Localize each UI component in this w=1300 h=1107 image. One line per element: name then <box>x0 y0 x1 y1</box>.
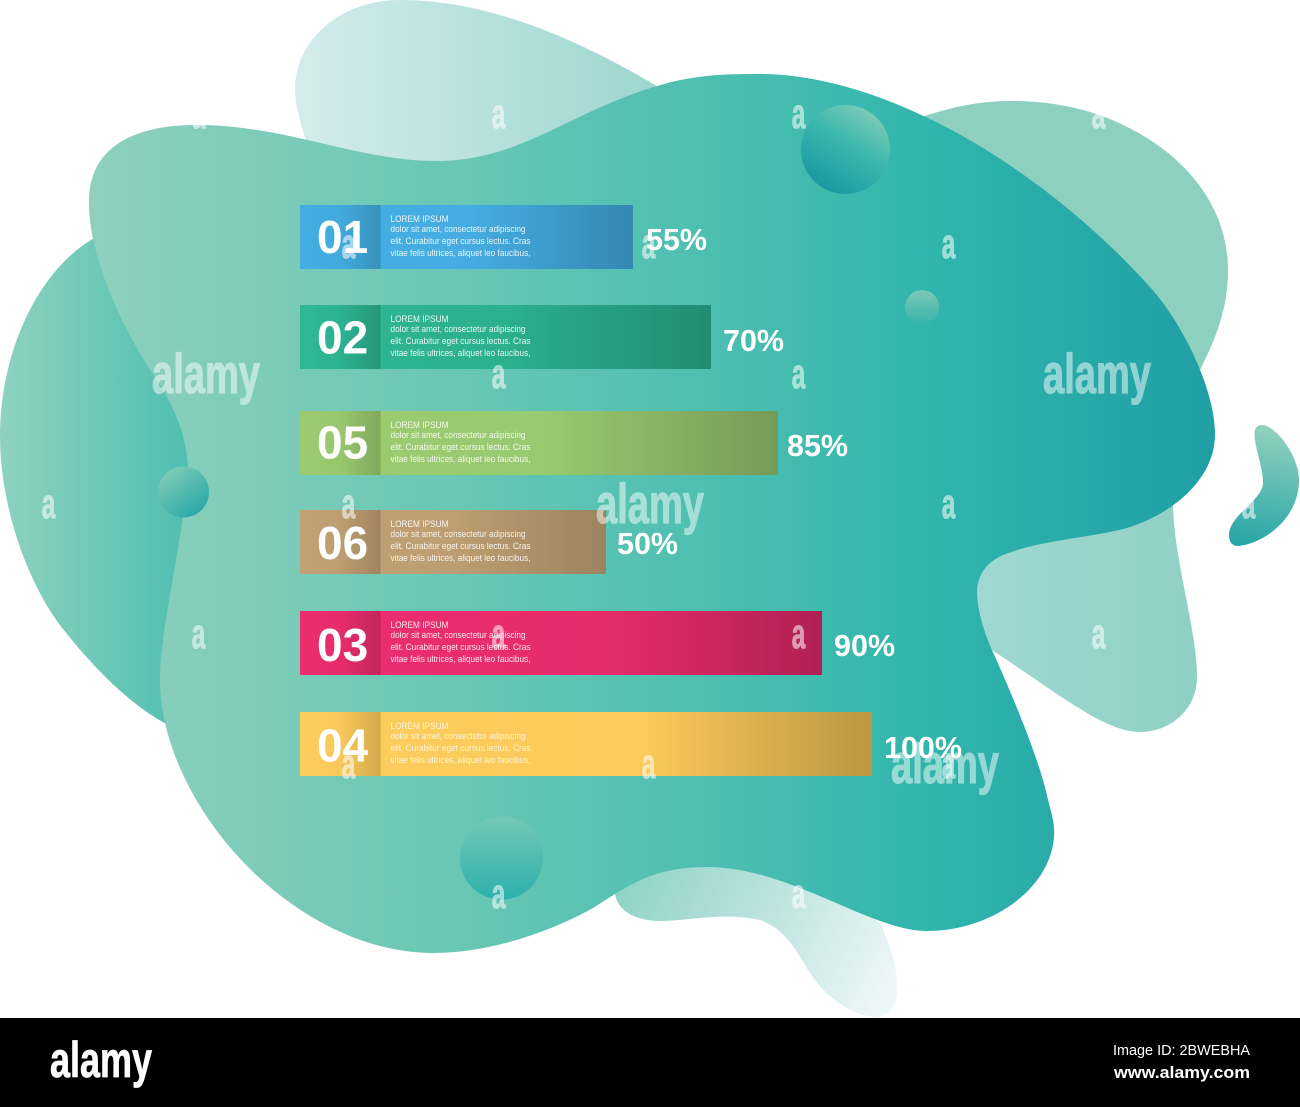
watermark words <box>152 344 1151 796</box>
bar 02: dolor sit amet, consectetur adipiscing <box>390 324 526 334</box>
bar 04: LOREM IPSUM <box>390 721 448 731</box>
bar 04 <box>300 712 962 776</box>
watermark letters: a <box>792 351 806 398</box>
bar 06: 50% <box>617 527 678 561</box>
watermark letters: a <box>942 741 956 788</box>
blob: main <box>89 74 1215 953</box>
bar 01: 01 <box>317 211 368 263</box>
bar 03: elit. Curabitur eget cursus lectus. Cras <box>390 642 531 652</box>
watermark letters: a <box>492 351 506 398</box>
sphere small <box>905 290 939 324</box>
bar 05: dolor sit amet, consectetur adipiscing <box>390 430 526 440</box>
blob: left <box>0 235 300 726</box>
bar 04: elit. Curabitur eget cursus lectus. Cras <box>390 743 531 753</box>
watermark letters: a <box>192 91 206 138</box>
bar 05: vitae felis ultrices, aliquet leo faucibus, <box>390 454 530 464</box>
blob: right <box>900 101 1228 370</box>
watermark letters: a <box>942 221 956 268</box>
watermark words: alamy <box>596 474 704 536</box>
bar 03: vitae felis ultrices, aliquet leo faucibus, <box>390 654 530 664</box>
watermark letters: a <box>342 221 356 268</box>
bar 04: dolor sit amet, consectetur adipiscing <box>390 731 526 741</box>
watermark letters: a <box>1092 91 1106 138</box>
bar 01: 55% <box>646 223 707 257</box>
watermark words: alamy <box>1043 344 1151 406</box>
website: www.alamy.com <box>1113 1063 1250 1082</box>
bar 03 <box>300 611 895 675</box>
bar 03: 03 <box>317 619 368 671</box>
bar 01: vitae felis ultrices, aliquet leo faucibus, <box>390 248 530 258</box>
watermark letters: a <box>642 221 656 268</box>
watermark letters: a <box>492 91 506 138</box>
watermark letters: a <box>792 91 806 138</box>
bar 05: LOREM IPSUM <box>390 420 448 430</box>
bar 04: vitae felis ultrices, aliquet leo faucibus, <box>390 755 530 765</box>
watermark letters: a <box>42 481 56 528</box>
watermark letters: a <box>342 481 356 528</box>
watermark letters: a <box>1092 611 1106 658</box>
bar 01: elit. Curabitur eget cursus lectus. Cras <box>390 236 531 246</box>
bar 06: elit. Curabitur eget cursus lectus. Cras <box>390 541 531 551</box>
footer bar <box>0 1018 1300 1107</box>
bar 02: elit. Curabitur eget cursus lectus. Cras <box>390 336 531 346</box>
bar 06: LOREM IPSUM <box>390 519 448 529</box>
bar 02: vitae felis ultrices, aliquet leo faucibus, <box>390 348 530 358</box>
sphere large <box>801 105 890 194</box>
footer logo: alamy <box>50 1033 152 1088</box>
watermark letters: a <box>792 611 806 658</box>
watermark letters: a <box>492 611 506 658</box>
bar 03: LOREM IPSUM <box>390 620 448 630</box>
bar 06: dolor sit amet, consectetur adipiscing <box>390 529 526 539</box>
bar 05: elit. Curabitur eget cursus lectus. Cras <box>390 442 531 452</box>
sphere left <box>158 466 209 518</box>
bar 06 <box>300 510 678 574</box>
bar 05: 05 <box>317 416 368 468</box>
bar 06: vitae felis ultrices, aliquet leo faucibus, <box>390 553 530 563</box>
watermark letters: a <box>942 481 956 528</box>
bar 03: dolor sit amet, consectetur adipiscing <box>390 630 526 640</box>
watermark words: alamy <box>152 344 260 406</box>
watermark letters: a <box>342 741 356 788</box>
bar 01 <box>300 205 707 269</box>
bar 06: 06 <box>317 517 368 569</box>
bar 04: 04 <box>317 720 369 772</box>
watermark letters: a <box>192 611 206 658</box>
watermark letters: a <box>642 741 656 788</box>
bar 05: 85% <box>787 429 848 463</box>
blob: top pale <box>295 0 660 200</box>
bar 02: 70% <box>723 324 784 358</box>
watermark letters: a <box>792 871 806 918</box>
bar 02: 02 <box>317 312 368 364</box>
image id: Image ID: 2BWEBHA <box>1113 1042 1250 1059</box>
watermark letters: a <box>1242 481 1256 528</box>
bar 05 <box>300 411 848 475</box>
bar 02 <box>300 305 784 369</box>
watermark words: alamy <box>891 734 999 796</box>
sphere bottom <box>460 816 543 900</box>
bar 01: dolor sit amet, consectetur adipiscing <box>390 224 526 234</box>
blob: comma drop <box>1229 425 1299 546</box>
bar 02: LOREM IPSUM <box>390 314 448 324</box>
blob: lower right <box>950 505 1197 732</box>
bar 03: 90% <box>834 629 895 663</box>
bar 04: 100% <box>884 731 962 765</box>
watermark letters: a <box>492 871 506 918</box>
watermark letters <box>42 91 1256 918</box>
blob: bottom pale <box>615 860 897 1017</box>
bar 01: LOREM IPSUM <box>390 214 448 224</box>
